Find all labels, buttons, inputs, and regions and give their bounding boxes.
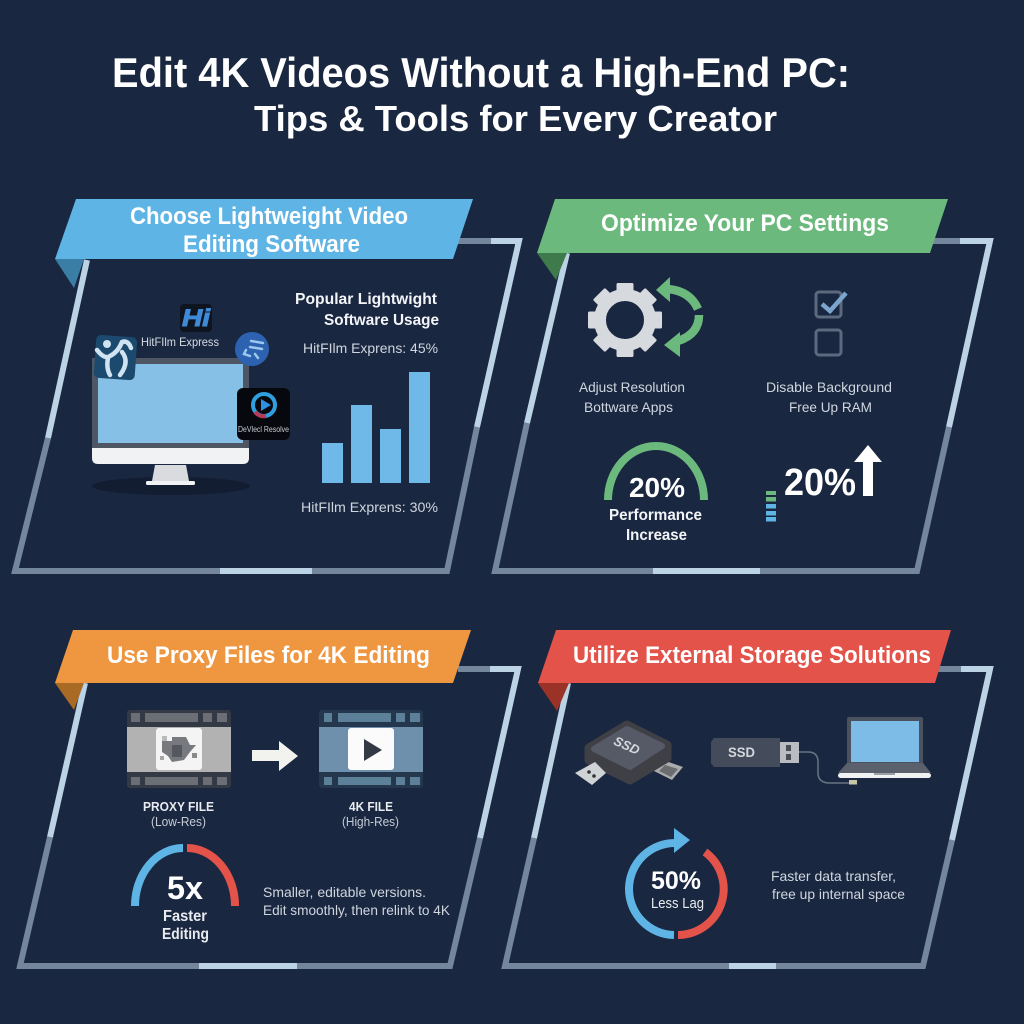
banner: optimize [537, 199, 948, 280]
arrow: proxy to 4k [252, 741, 298, 771]
title: Tips & Tools for Every Creator [254, 98, 777, 139]
banner: choose lightweight: Editing Software [183, 231, 360, 258]
gauge: performance increase: 20% [629, 472, 685, 503]
label: hitfilm express: HitFIlm Express [141, 335, 219, 349]
ring: 50 percent less lag [629, 828, 724, 935]
description: proxy: Edit smoothly, then relink to 4K [263, 902, 451, 918]
gauge: performance increase: Increase [626, 527, 687, 544]
icon: davinci resolve logo [237, 388, 290, 440]
gauge: 5x faster editing: Faster [163, 908, 207, 925]
icon: laptop [838, 717, 931, 784]
icon: usb stick [711, 738, 799, 767]
banner: external storage [538, 630, 951, 711]
label: 4k file [342, 800, 399, 829]
chart label bottom: HitFIlm Exprens: 30% [301, 499, 438, 515]
label: proxy file: (Low-Res) [151, 815, 206, 829]
title: Edit 4K Videos Without a High-End PC: [112, 49, 850, 96]
caption: adjust resolution [579, 379, 685, 415]
icon: dancer app logo [94, 335, 137, 380]
banner: choose lightweight [55, 199, 473, 288]
chart label top: HitFIlm Exprens: 45% [303, 340, 438, 356]
description: storage [771, 868, 905, 902]
icon: ssd square drive [575, 725, 683, 785]
caption: disable background: Free Up RAM [789, 399, 872, 415]
label: 4k file: (High-Res) [342, 815, 399, 829]
description: storage: Faster data transfer, [771, 868, 896, 884]
chart heading [295, 291, 439, 329]
ring: 50 percent less lag: Less Lag [651, 896, 704, 912]
banner: external storage: Utilize External Storage Solutions [573, 642, 931, 669]
icon: gear with arrows [588, 277, 699, 357]
label: proxy file: PROXY FILE [143, 800, 214, 814]
icon: monitor [92, 358, 250, 495]
banner: proxy [55, 630, 471, 710]
icon: checkboxes [816, 292, 846, 355]
gauge: performance increase [608, 446, 704, 544]
caption: adjust resolution: Bottware Apps [584, 399, 673, 415]
chart heading: Software Usage [324, 312, 439, 329]
icon: blue circle logo [235, 332, 269, 366]
icon: usb stick: SSD [728, 744, 755, 760]
banner: choose lightweight: Choose Lightweight Video [130, 203, 408, 230]
gauge: 5x faster editing [135, 848, 235, 943]
description: storage: free up internal space [772, 886, 905, 902]
description: proxy: Smaller, editable versions. [263, 884, 426, 900]
banner: proxy: Use Proxy Files for 4K Editing [107, 642, 430, 669]
gauge: 5x faster editing: 5x [167, 870, 203, 906]
panel: optimize pc settings [495, 199, 990, 571]
banner: optimize: Optimize Your PC Settings [601, 210, 889, 237]
panel: use proxy files [20, 630, 518, 966]
icon: proxy film strip [127, 710, 231, 788]
icon: davinci resolve logo: DeVlecl Resolve [238, 425, 289, 434]
ring: 50 percent less lag: 50% [651, 867, 701, 895]
label: proxy file [143, 800, 214, 829]
stat: 20 percent with arrow [766, 445, 882, 522]
icon: ssd square drive: SSD [612, 733, 643, 758]
gauge: 5x faster editing: Editing [162, 926, 209, 943]
title [112, 49, 850, 139]
stat: 20 percent with arrow: 20% [784, 462, 856, 504]
caption: disable background: Disable Background [766, 379, 892, 395]
bar chart [322, 372, 430, 483]
label: 4k file: 4K FILE [349, 800, 393, 814]
cable [799, 752, 849, 783]
icon: hitfilm logo: Hi [182, 305, 212, 332]
description: proxy [263, 884, 451, 918]
icon: 4k film strip [319, 710, 423, 788]
chart heading: Popular Lightwight [295, 291, 438, 308]
caption: disable background [766, 379, 892, 415]
gauge: performance increase: Performance [609, 507, 702, 524]
caption: adjust resolution: Adjust Resolution [579, 379, 685, 395]
panel: external storage [505, 630, 990, 966]
panel: choose lightweight software [15, 199, 519, 571]
